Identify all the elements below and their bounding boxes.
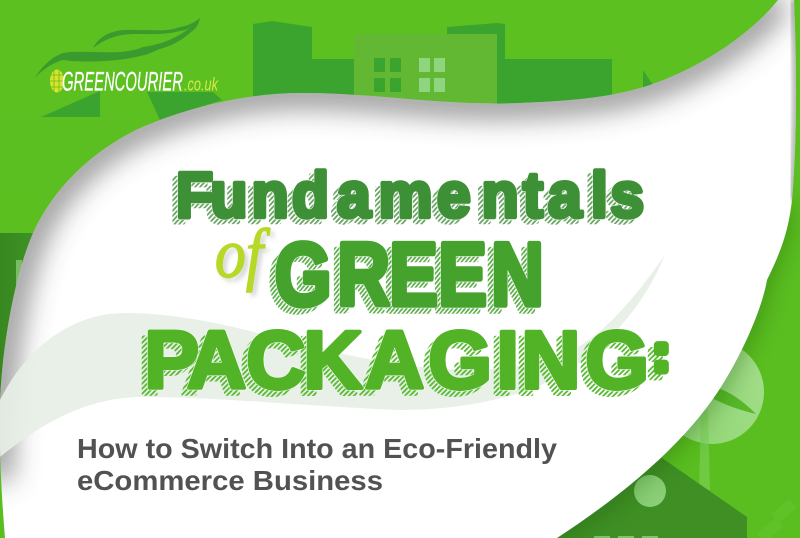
title word: PACKAGING: : <box>653 326 670 382</box>
title word: GREEN: GREEN <box>275 225 544 325</box>
house with round window <box>555 458 797 538</box>
logo leaf swoosh <box>35 18 200 78</box>
wind turbine <box>660 340 764 490</box>
title word: of: of <box>215 216 271 293</box>
pale leaf band behind title <box>0 255 665 457</box>
subtitle: eCommerce Business <box>77 465 383 496</box>
soft shadow cast by the leaf <box>500 200 794 538</box>
title word: GREEN: GREEN <box>269 231 538 331</box>
logo wordmark: GREENCOURIER <box>62 66 183 96</box>
logo domain: .co.uk <box>184 74 219 94</box>
subtitle: How to Switch Into an Eco-Friendly <box>77 433 557 464</box>
logo globe <box>50 70 64 92</box>
left dark building <box>0 233 40 403</box>
building windows <box>374 58 445 92</box>
subtitle <box>77 433 557 496</box>
title line: Fundamentals: Fundamentals <box>171 165 639 236</box>
title word: PACKAGING: PACKAGING <box>138 321 643 412</box>
logo: GreenCourier <box>35 18 219 96</box>
title line: Fundamentals: Fundamentals <box>176 160 644 231</box>
title word: PACKAGING: PACKAGING <box>144 315 649 406</box>
city skyline buildings <box>41 21 653 120</box>
title word: PACKAGING: PACKAGING <box>144 315 649 406</box>
title word: GREEN: GREEN <box>275 225 544 325</box>
title line: Fundamentals: Fundamentals <box>176 160 644 231</box>
title word: of: of <box>219 220 275 297</box>
title word: PACKAGING: : <box>647 332 664 388</box>
